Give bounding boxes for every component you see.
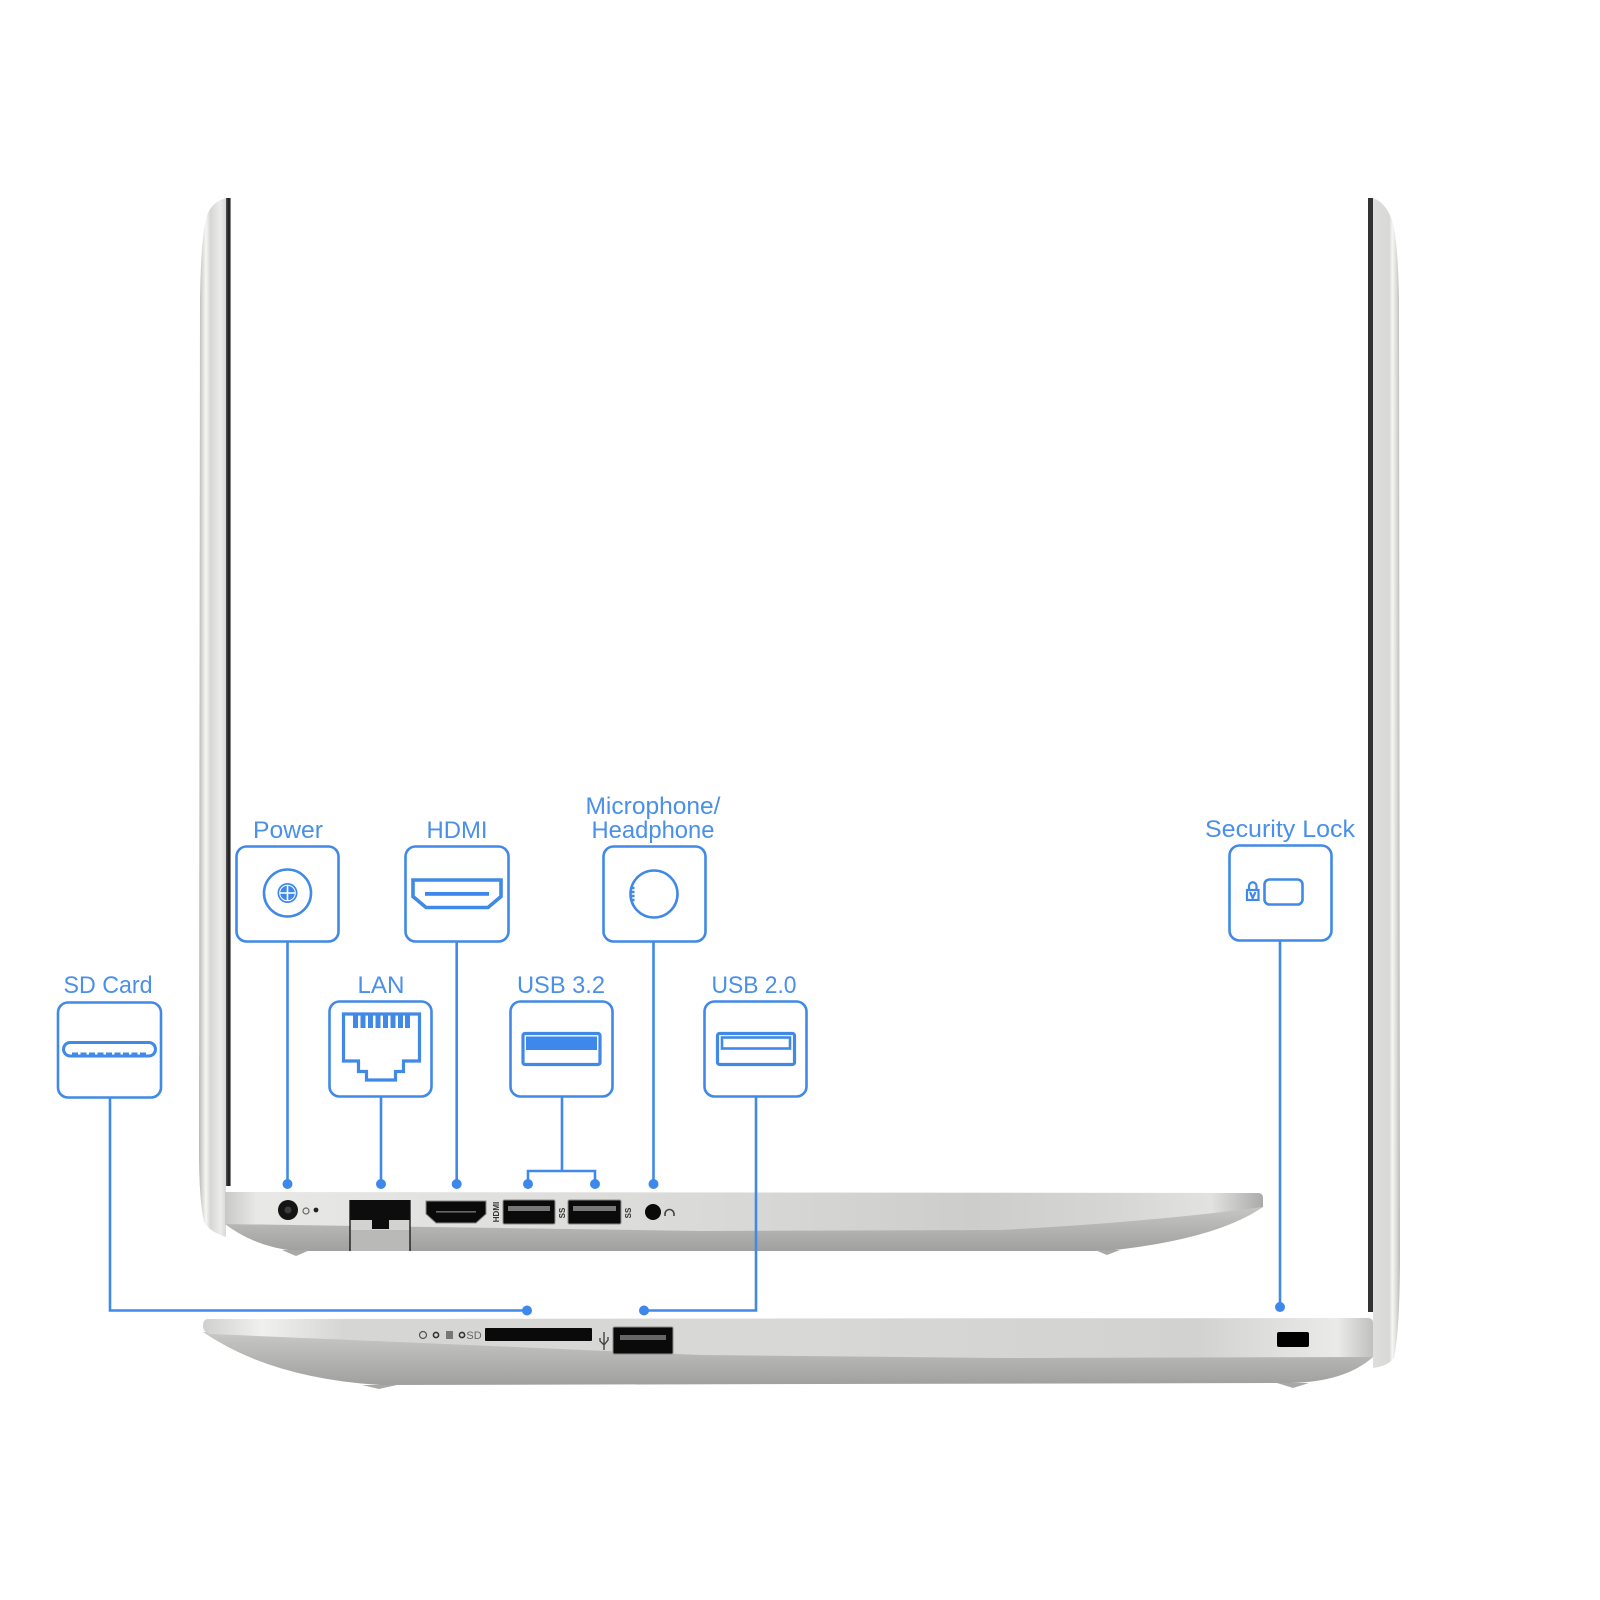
- label: Power: Power: [253, 817, 323, 844]
- right laptop lid edge: [1368, 198, 1400, 1368]
- port: HDMI: [426, 1201, 501, 1223]
- connector: Power: [282, 941, 292, 1189]
- left laptop lid edge: [199, 198, 231, 1237]
- port: USB 3.2 second: [568, 1200, 633, 1224]
- port: USB 3.2 first: [503, 1200, 567, 1224]
- callout: Power: [236, 817, 338, 942]
- label: HDMI: HDMI: [426, 817, 488, 844]
- icon: ethernet: [344, 1014, 420, 1080]
- icon: USB 3.2 port: [523, 1034, 600, 1064]
- connector: USB 3.2 bracket: [523, 1096, 600, 1189]
- connector: SD Card: [110, 1097, 532, 1316]
- icon: power jack: [264, 870, 311, 916]
- connector: LAN: [376, 1096, 386, 1189]
- port: HDMI: HDMI: [492, 1202, 501, 1222]
- callout: SD Card: [58, 972, 161, 1098]
- callout: Security Lock: [1205, 816, 1356, 940]
- connector: Security Lock: [1275, 940, 1285, 1312]
- port: LAN: [350, 1200, 410, 1251]
- connector: Microphone: [648, 941, 658, 1189]
- upper laptop base (left side): [225, 1192, 1263, 1256]
- icon: audio jack: [630, 870, 678, 918]
- callout: USB 2.0: [704, 972, 806, 1096]
- port: status lights: SD: [466, 1330, 482, 1342]
- port: USB 3.2 second: SS: [624, 1207, 633, 1218]
- port: USB 3.2 first: SS: [558, 1207, 567, 1218]
- lower laptop base (right side): [203, 1318, 1373, 1389]
- label: USB 2.0: USB 2.0: [712, 972, 796, 999]
- label: USB 3.2: USB 3.2: [517, 972, 605, 999]
- port: status lights: [420, 1330, 482, 1342]
- port: audio jack: [645, 1204, 674, 1220]
- label: Security Lock: Security Lock: [1205, 816, 1356, 843]
- connector: USB 2.0: [639, 1096, 756, 1316]
- icon: lock slot: [1247, 880, 1302, 904]
- port: USB 2.0: [613, 1327, 673, 1354]
- icon: SD slot: [64, 1042, 156, 1056]
- port: power jack: [278, 1200, 318, 1220]
- port: SD card slot: [485, 1328, 592, 1341]
- label: Microphone/: Microphone/: [586, 793, 721, 820]
- label: SD Card: SD Card: [64, 972, 152, 999]
- callout: USB 3.2: [510, 972, 612, 1096]
- icon: HDMI: [413, 880, 501, 908]
- label: LAN: LAN: [358, 972, 404, 999]
- port: USB 2.0 symbol: [600, 1332, 608, 1350]
- callout: HDMI: [406, 817, 508, 942]
- connector: HDMI: [452, 941, 462, 1189]
- port: security lock slot: [1277, 1332, 1309, 1347]
- icon: USB 2.0 port: [718, 1034, 794, 1064]
- label: Headphone: Headphone: [592, 817, 714, 844]
- callout: Microphone/Headphone: [586, 793, 721, 942]
- callout: LAN: [330, 972, 432, 1096]
